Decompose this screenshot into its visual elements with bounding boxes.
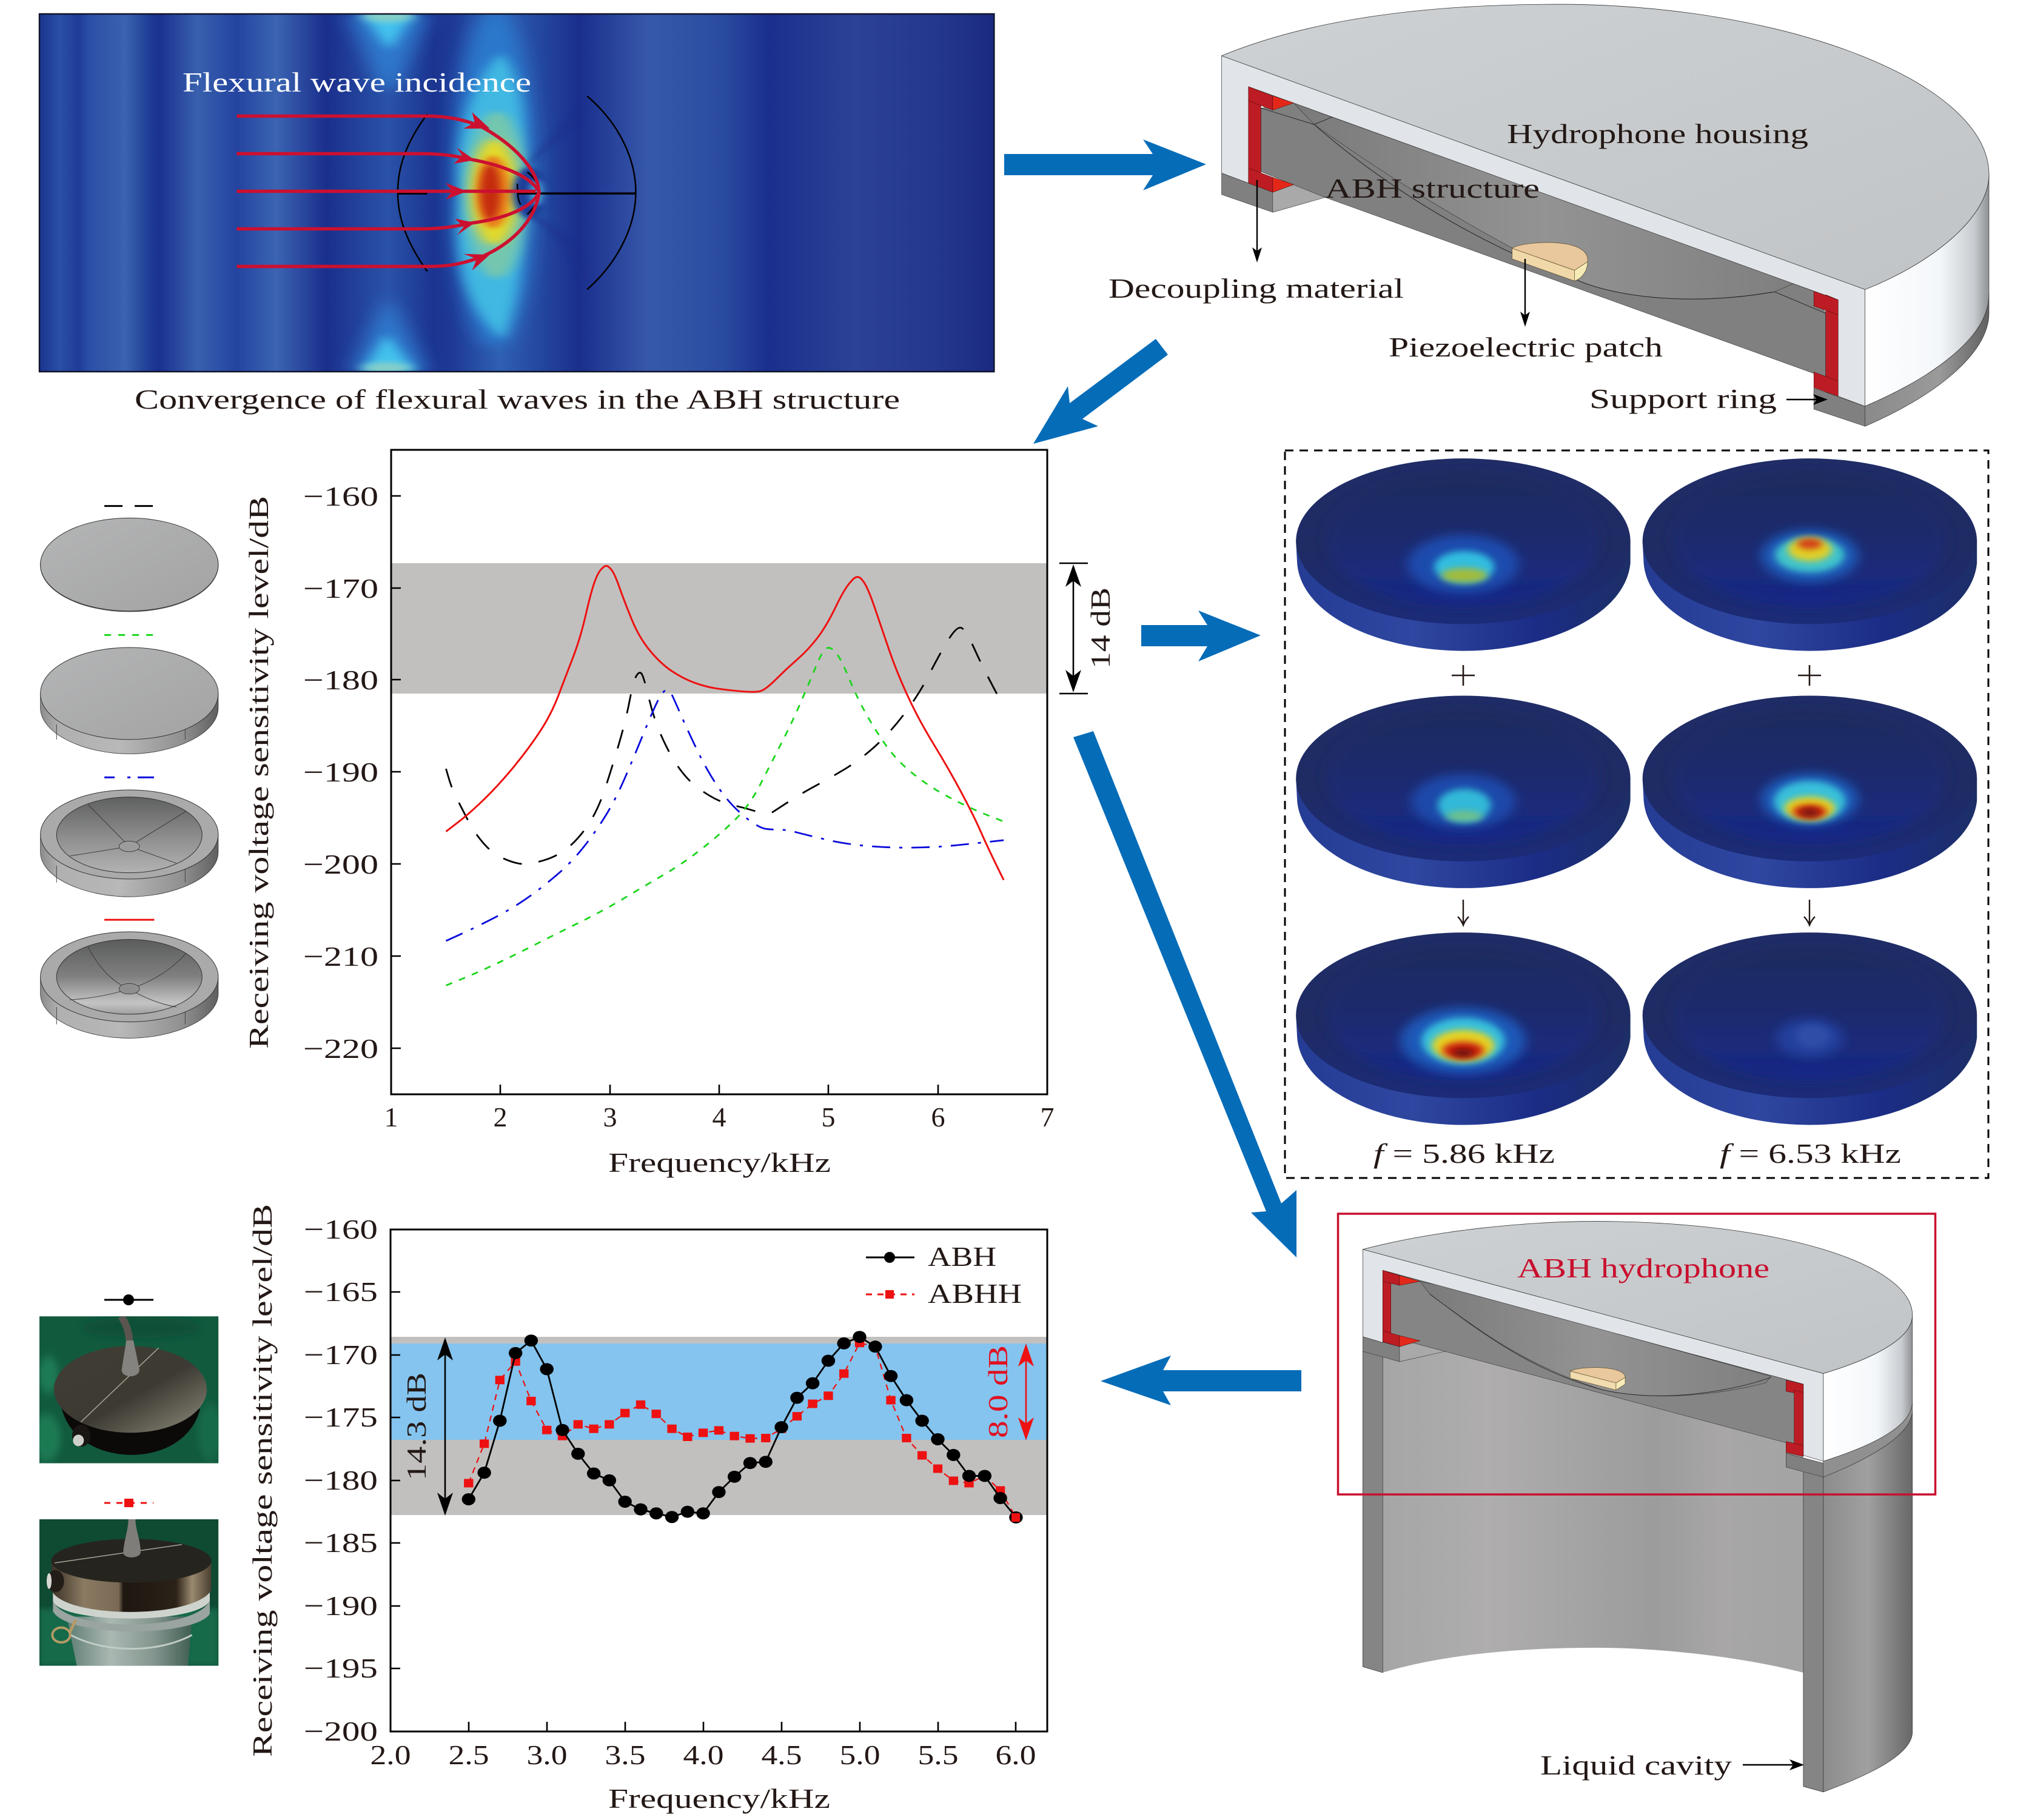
y tick labels: −170 [304, 1339, 378, 1370]
legend: ABHH [928, 1278, 1022, 1309]
ABH plate [1383, 1270, 1803, 1447]
x tick labels: 2 [494, 1102, 507, 1132]
disk: ABH power-law profile [41, 932, 218, 1038]
disk: ABH linear profile [41, 790, 218, 897]
y tick labels: −220 [303, 1033, 378, 1064]
arrow: fields to ABH hydrophone [1073, 731, 1296, 1257]
chart: simulated receiving voltage sensitivity [243, 450, 1116, 1178]
axes frame and ticks [391, 450, 1047, 1094]
x tick labels [370, 1739, 1036, 1770]
label: piezoelectric patch: Piezoelectric patch [1389, 332, 1663, 363]
label: hydrophone housing: Hydrophone housing [1507, 118, 1808, 149]
disk: row 2 right [1643, 696, 1977, 888]
y tick labels [304, 1214, 378, 1747]
disk: flat plate [40, 518, 218, 612]
arrow: sum left [1458, 900, 1469, 925]
label: ABH structure: ABH structure [1325, 173, 1540, 204]
x tick labels: 2.0 [370, 1739, 411, 1770]
arrow: heat map to hydrophone section [1004, 139, 1206, 190]
dimension: 14.3 dB: 14.3 dB [401, 1373, 432, 1480]
dimension: 14.3 dB [401, 1337, 453, 1516]
x tick labels: 3.0 [526, 1739, 568, 1770]
decoupling red liner [1383, 1270, 1803, 1456]
label: decoupling material: Decoupling material [1108, 273, 1404, 304]
series: ABH black circles [469, 1337, 1016, 1517]
x tick labels: 2.5 [449, 1739, 489, 1770]
x tick labels: 4.5 [762, 1739, 802, 1770]
x tick labels [384, 1102, 1054, 1132]
arrow: hydrophone to measured curves [1101, 1356, 1301, 1405]
highlight frame: ABH hydrophone [1338, 1214, 1936, 1494]
photo: ABHH hydrophone [39, 1519, 218, 1666]
piezoelectric patch [1512, 243, 1588, 281]
caption: convergence of flexural waves: Convergence of flexural waves in the ABH structure [135, 384, 900, 415]
gray band: 14 dB range [391, 563, 1047, 694]
y axis title: Receiving voltage sensitivity level/dB [247, 1204, 278, 1757]
y tick labels: −170 [303, 573, 378, 604]
x tick labels: 4 [712, 1102, 726, 1132]
dimension: 14 dB [1059, 563, 1116, 694]
y tick labels: −165 [304, 1276, 378, 1307]
legend line: black dashed [104, 505, 154, 507]
y tick labels: −180 [304, 1465, 378, 1496]
x tick labels: 4.0 [683, 1739, 724, 1770]
y axis title: Receiving voltage sensitivity level/dB [243, 496, 274, 1049]
legend line: ABHH [104, 1499, 153, 1507]
wave ray paths [236, 116, 539, 266]
x tick labels: 3 [603, 1102, 617, 1132]
tube cut walls [1363, 1351, 1823, 1792]
axes frame and ticks [391, 1230, 1047, 1731]
legend: ABH [928, 1241, 996, 1272]
housing top [1221, 4, 1989, 290]
disk: row 2 left [1296, 696, 1631, 888]
arrow: piezoelectric patch pointer [1520, 259, 1530, 327]
arrow: liquid cavity pointer [1743, 1759, 1804, 1770]
legend line: ABH [104, 1294, 153, 1305]
photo: ABH hydrophone [32, 1316, 223, 1464]
blue band: 8.0 dB range [391, 1343, 1047, 1440]
housing cut face [1363, 1250, 1823, 1461]
panel: ABH hydrophone with liquid cavity [1338, 1214, 1936, 1792]
label: ABH hydrophone: ABH hydrophone [1517, 1253, 1769, 1283]
end marker overlap: ABHH final point [1011, 1513, 1020, 1522]
disk: row 1 left [1296, 458, 1631, 651]
legend [866, 1241, 1022, 1309]
arrow: hydrophone section to simulated curves [1033, 339, 1168, 444]
gray band: 14.3 dB range [391, 1337, 1047, 1515]
disk: thick plate [41, 647, 218, 754]
arrow: curves to displacement fields [1141, 611, 1261, 661]
curve: green dotted [446, 648, 1004, 985]
plus sign right [1798, 665, 1821, 686]
piezoelectric patch [1570, 1368, 1625, 1390]
y tick labels: −160 [303, 481, 378, 512]
arrow: sum right [1804, 900, 1815, 925]
dimension: 14 dB: 14 dB [1085, 587, 1116, 669]
x tick labels: 1 [384, 1102, 398, 1132]
label: flexural wave incidence: Flexural wave incidence [183, 67, 531, 98]
disk: row 3 left [1296, 932, 1631, 1125]
curve: red solid [446, 566, 1004, 880]
panel: hydrophone cross-section [1108, 4, 1989, 426]
arrow: decoupling material pointer [1252, 180, 1262, 263]
x tick labels: 6 [931, 1102, 945, 1132]
label: f = 5.86 kHz: f = 5.86 kHz [1373, 1138, 1555, 1169]
support ring left and right [1221, 173, 1865, 426]
y tick labels: −190 [303, 757, 378, 788]
decoupling material, red liner [1249, 87, 1838, 396]
ray arrowheads [446, 112, 490, 270]
legend line: blue dash-dot [104, 777, 154, 778]
x tick labels: 7 [1041, 1102, 1054, 1132]
disk: row 1 right [1643, 458, 1977, 651]
x tick labels: 5 [821, 1102, 836, 1132]
cavity and ABH plate [1261, 103, 1826, 378]
series: ABHH red dashed squares [469, 1343, 1016, 1517]
ABH outline arcs [398, 96, 636, 290]
y tick labels: −160 [304, 1214, 378, 1245]
x axis title: Frequency/kHz [608, 1783, 830, 1814]
label: liquid cavity: Liquid cavity [1540, 1750, 1732, 1781]
legend line: green dotted [104, 634, 154, 636]
support ring [1363, 1337, 1913, 1477]
y tick labels: −180 [303, 664, 378, 695]
arrow: support ring pointer [1786, 394, 1828, 405]
dimension: 8.0 dB [982, 1343, 1034, 1440]
y tick labels: −200 [304, 1716, 378, 1747]
y tick labels: −210 [303, 941, 378, 972]
housing top [1363, 1222, 1913, 1373]
housing side wall [1823, 1315, 1913, 1461]
y tick labels [303, 481, 378, 1064]
dashed frame [1285, 450, 1988, 1178]
label: f = 6.53 kHz: f = 6.53 kHz [1720, 1138, 1901, 1169]
plus sign left [1452, 665, 1475, 686]
curve: black dashed [446, 627, 1004, 864]
y tick labels: −190 [304, 1590, 378, 1621]
x axis title: Frequency/kHz [608, 1147, 831, 1178]
housing cut face [1221, 56, 1865, 406]
panel: hydrophone photographs [32, 1294, 223, 1666]
cavity inner wall [1383, 1335, 1803, 1673]
legend line: red solid [104, 919, 154, 921]
y tick labels: −175 [304, 1402, 378, 1433]
x tick labels: 5.0 [839, 1739, 880, 1770]
y tick labels: −195 [304, 1653, 378, 1684]
panel: flexural wave convergence heat map [39, 8, 994, 373]
disk: row 3 right [1643, 932, 1977, 1125]
label: support ring: Support ring [1589, 383, 1777, 414]
panel: structure legend disks [40, 506, 218, 1038]
x tick labels: 6.0 [996, 1739, 1036, 1770]
liquid cavity tube outer [1823, 1410, 1913, 1792]
x tick labels: 3.5 [605, 1739, 645, 1770]
housing side wall [1865, 175, 1989, 406]
chart: measured sensitivity ABH versus ABHH [247, 1204, 1047, 1814]
curve: blue dash-dot [446, 690, 1004, 941]
panel: modal superposition heat disks [1285, 450, 1988, 1178]
y tick labels: −185 [304, 1527, 378, 1558]
y tick labels: −200 [303, 849, 378, 880]
dimension: 8.0 dB: 8.0 dB [982, 1345, 1013, 1438]
lower support ring outer [1865, 295, 1989, 426]
x tick labels: 5.5 [918, 1739, 958, 1770]
